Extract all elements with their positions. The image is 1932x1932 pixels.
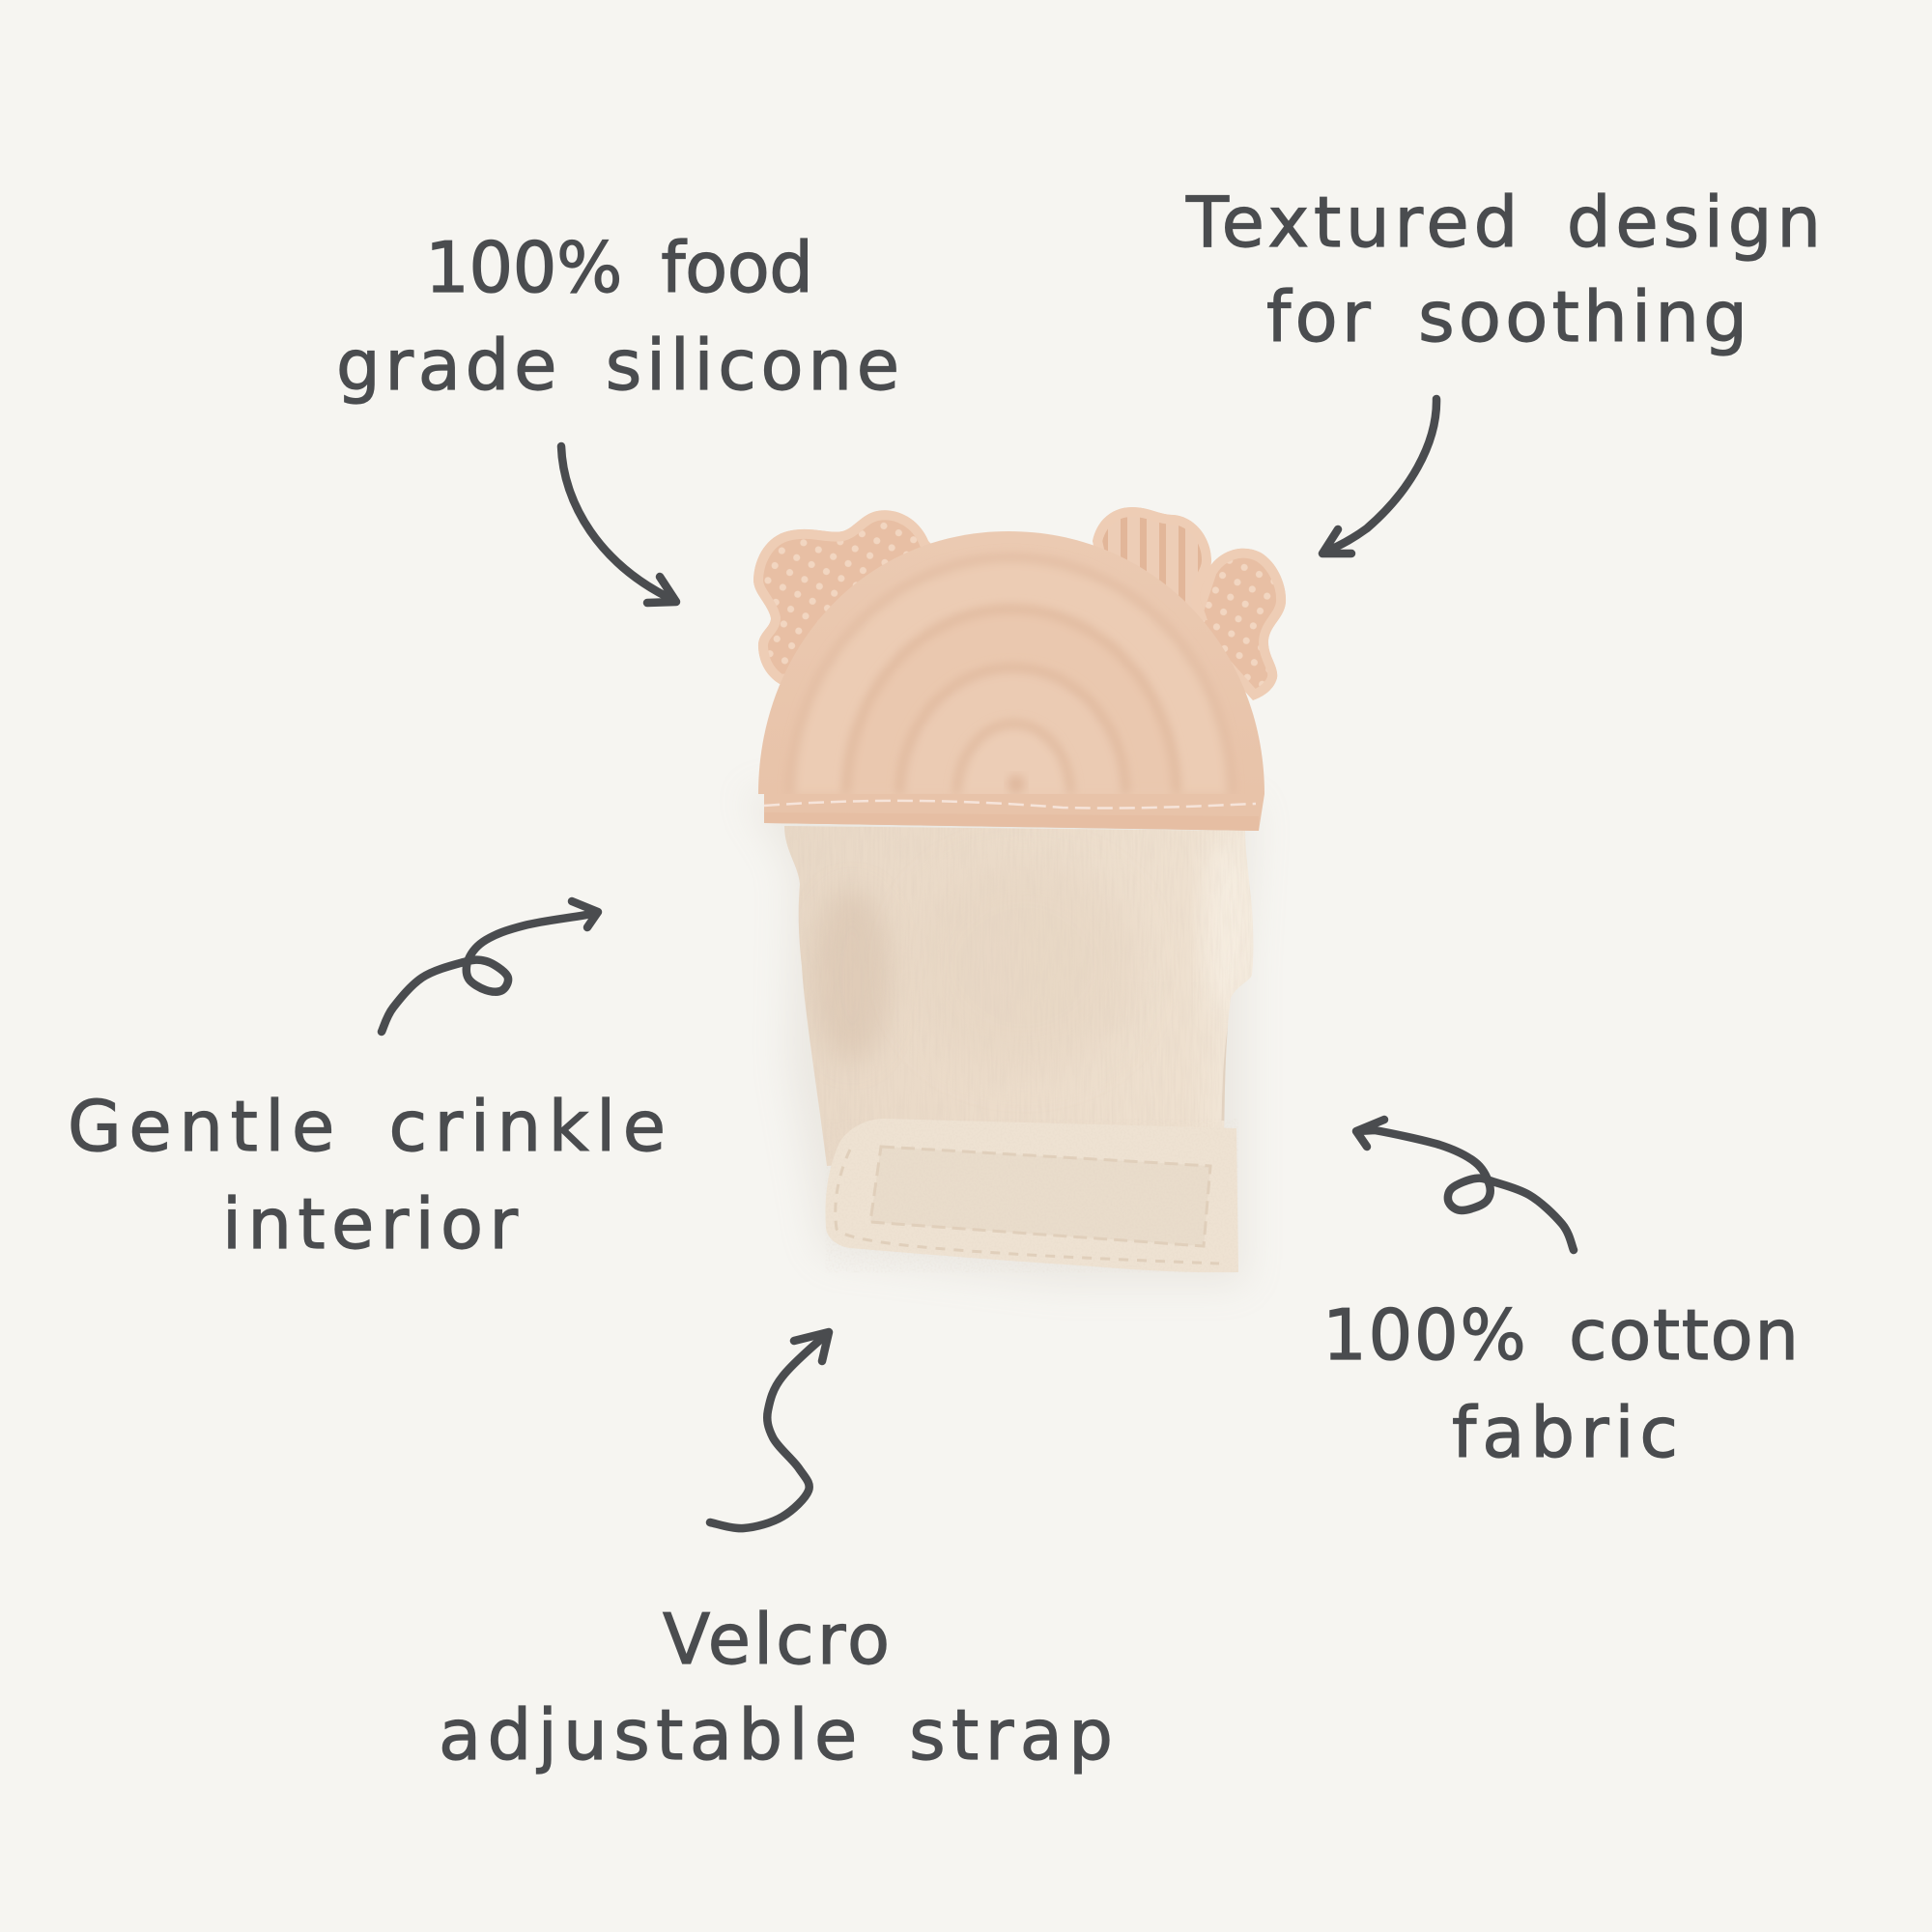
cotton fabric body	[773, 821, 1265, 1166]
arrow: textured design	[1322, 399, 1436, 554]
callout: textured design for soothing: Textured design	[1185, 182, 1821, 263]
arrow: velcro strap	[710, 1332, 829, 1528]
callout: 100% food grade silicone: grade silicone	[336, 325, 899, 406]
silicone rainbow dome	[758, 531, 1264, 794]
velcro strap	[826, 1119, 1238, 1272]
callout: velcro adjustable strap	[439, 1599, 1113, 1776]
arrow: cotton fabric	[1356, 1120, 1574, 1250]
product: teething mitten	[744, 507, 1286, 1285]
callout: 100% food grade silicone: 100% food	[425, 227, 813, 308]
callout: textured design for soothing: for soothing	[1266, 276, 1747, 357]
callout: 100% cotton fabric: 100% cotton	[1322, 1294, 1799, 1376]
callout: textured design for soothing	[1185, 182, 1821, 357]
callout: gentle crinkle interior: interior	[222, 1183, 518, 1264]
silicone ear: dotted right	[1200, 549, 1287, 700]
silicone stitched band	[764, 794, 1264, 831]
callout: gentle crinkle interior	[68, 1086, 666, 1264]
soft drop shadow	[744, 792, 1256, 1285]
callout: 100% cotton fabric: fabric	[1452, 1392, 1678, 1473]
callout: 100% cotton fabric	[1322, 1294, 1799, 1473]
arrow: silicone	[561, 446, 676, 603]
silicone ear: striped	[1093, 507, 1211, 628]
callout: velcro adjustable strap: adjustable strap	[439, 1694, 1113, 1776]
callout: velcro adjustable strap: Velcro	[663, 1599, 890, 1680]
callout: 100% food grade silicone	[336, 227, 899, 406]
silicone ear: dotted left	[753, 510, 942, 684]
callout: gentle crinkle interior: Gentle crinkle	[68, 1086, 666, 1167]
arrow: crinkle interior	[382, 901, 598, 1032]
